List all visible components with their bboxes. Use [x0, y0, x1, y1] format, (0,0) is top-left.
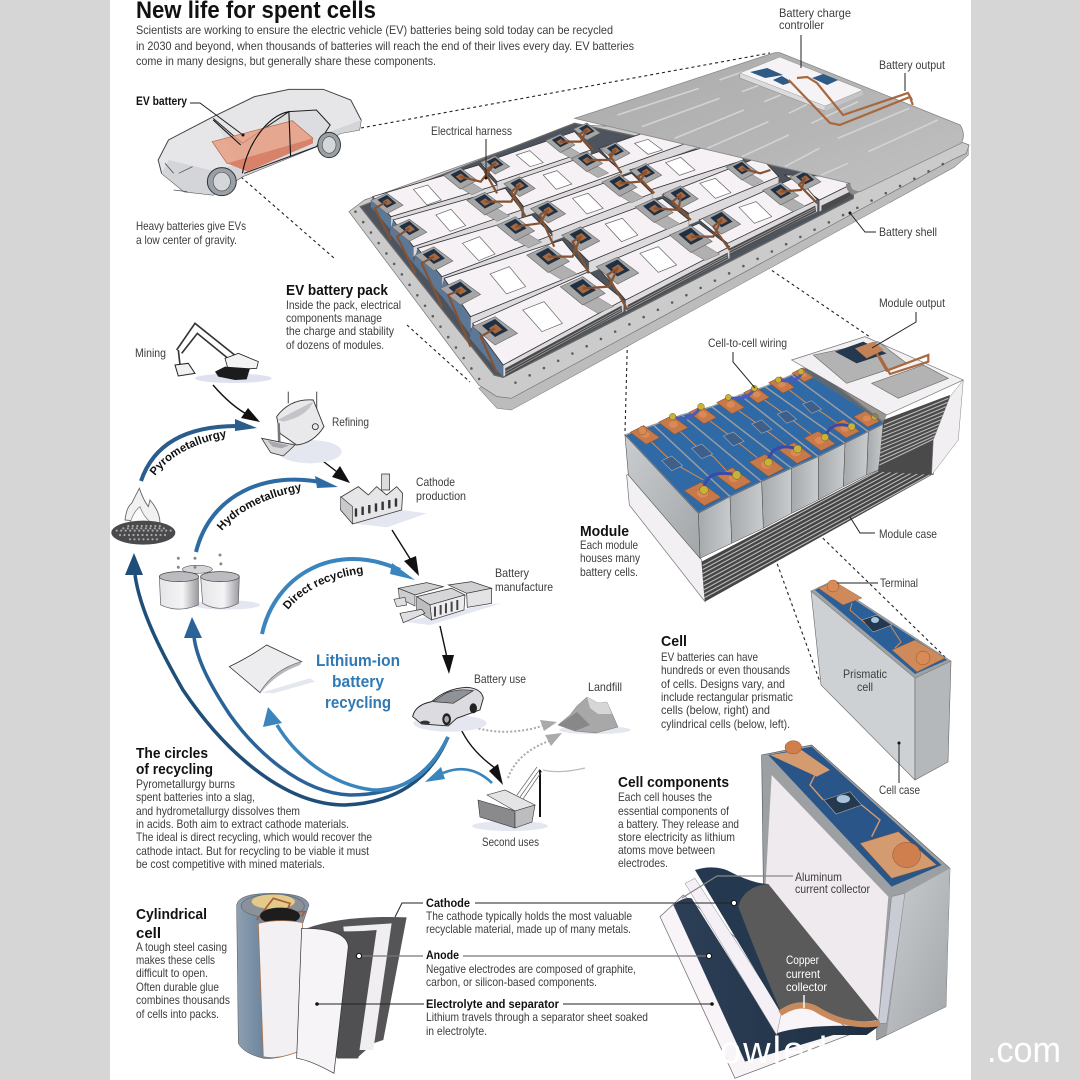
caption: low center of gravity: a low center of gravity. [136, 233, 237, 247]
module housing [792, 337, 963, 475]
title: lithium-ion battery recycling: battery [332, 672, 384, 691]
text: cell: cells (below, right) and [661, 703, 770, 717]
label: terminal [837, 576, 918, 590]
arrow: recycling return to direct [263, 707, 448, 790]
text: the circles of recycling: and hydrometallurgy dissolves them [136, 804, 300, 818]
label: battery shell [848, 212, 937, 239]
label: copper current collector: collector [786, 980, 827, 994]
label: aluminum current collector: current collector [795, 882, 870, 896]
callout: anode: Negative electrodes are composed of graphite, [426, 962, 636, 976]
cell-to-cell wiring [638, 369, 878, 494]
cylinder inner white roll [258, 921, 303, 1058]
label: electrical harness [431, 124, 512, 180]
watermark: .com [987, 1029, 1061, 1070]
text: EV battery pack [286, 282, 401, 352]
arrow: refining to cathode [315, 455, 350, 483]
intro text: in 2030 and beyond, when thousands of batteries will reach the end of their lives every day. EV batteries [136, 39, 634, 53]
label: battery shell: Battery shell [879, 225, 937, 239]
icon: battery manufacture buildings [394, 582, 502, 625]
text: the circles of recycling: The ideal is direct recycling, which would recover the [136, 830, 372, 844]
front white sheet [297, 928, 348, 1073]
text: EV battery pack: the charge and stability [286, 324, 394, 338]
icon: car in use [413, 687, 487, 732]
text: cylindrical cell: makes these cells [136, 953, 215, 967]
callout: cathode [395, 896, 737, 936]
cell traces, plates and terminals [630, 368, 879, 506]
label: EV battery: EV battery [136, 94, 187, 108]
label: module output [872, 296, 946, 348]
curved label: Pyrometallurgy: Pyrometallurgy [149, 431, 226, 476]
battery modules [371, 117, 850, 377]
label: cathode production [416, 475, 466, 503]
text: cylindrical cell [136, 906, 230, 1021]
arrow: hydrometallurgy [196, 476, 338, 552]
curved label: Hydrometallurgy: Hydrometallurgy [216, 484, 300, 530]
dark outer sheet [307, 917, 407, 1058]
label: terminal: Terminal [880, 576, 918, 590]
label: battery manufacture: Battery [495, 566, 529, 580]
text: cylindrical cell: difficult to open. [136, 966, 208, 980]
icon: second uses unit and utility pole [472, 767, 585, 831]
arrow: pyrometallurgy [141, 419, 257, 481]
text: cell components: a battery. They release and [618, 817, 739, 831]
callout: anode [356, 948, 712, 989]
label: battery manufacture: manufacture [495, 580, 553, 594]
text: EV battery pack: of dozens of modules. [286, 338, 384, 352]
icon: cathode factory [341, 474, 427, 527]
label: prismatic cell: cell [857, 680, 873, 694]
label: landfill: Landfill [588, 680, 622, 694]
label: battery charge controller: Battery charge [779, 6, 851, 20]
text: cylindrical cell: combines thousands [136, 993, 230, 1007]
arrow: direct recycling [262, 559, 415, 634]
icon: landfill [558, 697, 631, 734]
title: lithium-ion battery recycling: recycling [325, 693, 391, 712]
dark anode sheet [307, 928, 377, 1058]
label: prismatic cell: Prismatic [843, 667, 887, 681]
case frame [762, 741, 950, 1040]
text: module: houses many [580, 551, 640, 565]
intro text: Scientists are working to ensure the electric vehicle (EV) batteries being sold today can be recycled [136, 23, 613, 37]
label: battery output: Battery output [879, 58, 946, 72]
ribbed case front [702, 440, 933, 602]
title: lithium-ion battery recycling [316, 651, 400, 712]
text: cell: hundreds or even thousands [661, 663, 790, 677]
text: cylindrical cell: Cylindrical [136, 906, 207, 923]
watermark [720, 1029, 1061, 1072]
text: the circles of recycling: cathode intact. But for recycling to be viable it must [136, 844, 370, 858]
text: module: battery cells. [580, 565, 638, 579]
icon: refining ladle [262, 392, 342, 463]
label: copper current collector [786, 953, 827, 1008]
text: cell: cylindrical cells (below, left). [661, 717, 790, 731]
label: mining: Mining [135, 346, 166, 360]
label: module case [850, 517, 937, 541]
icon: leaching tanks [159, 555, 260, 610]
label: copper current collector: Copper [786, 953, 819, 967]
text: cell components: atoms move between [618, 843, 715, 857]
text: cell components: essential components of [618, 804, 730, 818]
callout: electrolyte and separator: Electrolyte and separator [426, 997, 559, 1011]
label: battery output [879, 58, 946, 91]
label: cathode production: production [416, 489, 466, 503]
text: EV battery pack: EV battery pack [286, 282, 389, 299]
label: refining: Refining [332, 415, 369, 429]
text: the circles of recycling: in acids. Both aim to extract cathode materials. [136, 817, 349, 831]
watermark: owledge [720, 1030, 876, 1072]
dashed connectors between components [241, 53, 945, 682]
callout: anode: Anode [426, 948, 459, 962]
illustration: car with EV battery [158, 89, 361, 196]
text: cylindrical cell: cell [136, 925, 161, 942]
label: cell case: Cell case [879, 783, 920, 797]
icon: excavator [175, 323, 272, 383]
arrow: dotted second uses to landfill [508, 733, 562, 778]
illustration: prismatic cell [811, 580, 951, 780]
label: aluminum current collector [682, 870, 870, 898]
text: cell components: Cell components [618, 774, 729, 791]
text: module: Each module [580, 538, 638, 552]
text: cell: Cell [661, 633, 687, 650]
text: cell components: store electricity as lithium [618, 830, 735, 844]
unrolled sheets [660, 867, 880, 1078]
text: cylindrical cell: of cells into packs. [136, 1007, 219, 1021]
text: cell: EV batteries can have [661, 650, 758, 664]
label: cell-to-cell wiring [708, 336, 787, 388]
text: cell: include rectangular prismatic [661, 690, 793, 704]
callout: electrolyte and separator: in electrolyte. [426, 1024, 487, 1038]
label: electrical harness: Electrical harness [431, 124, 512, 138]
arrow: battery use to second uses [460, 727, 503, 785]
curved label: Direct recycling: Direct recycling [282, 567, 363, 610]
text: the circles of recycling: be cost competitive with mined materials. [136, 857, 325, 871]
illustration: EV battery pack [349, 53, 969, 410]
module side ribs [505, 192, 850, 377]
label: battery charge controller [779, 6, 851, 68]
white inner sheet [343, 923, 392, 1050]
text: the circles of recycling: spent batteries into a slag, [136, 790, 255, 804]
callout: cathode: Cathode [426, 896, 470, 910]
cylinder casing [237, 893, 309, 1059]
arrow: dotted to landfill [467, 720, 557, 732]
secondary connector plates [460, 148, 805, 313]
label: copper current collector: current [786, 967, 821, 981]
cylinder top [241, 894, 305, 924]
label: module case: Module case [879, 527, 937, 541]
arrow: second uses return [425, 767, 492, 783]
folded lid [575, 53, 963, 195]
caption: low center of gravity [136, 219, 246, 247]
module case base [627, 473, 705, 602]
text: cell components: Each cell houses the [618, 790, 712, 804]
battery charge controller [740, 57, 913, 125]
callout: cathode: recyclable material, made up of many metals. [426, 922, 631, 936]
illustration: cutaway cell components [660, 741, 950, 1078]
label: battery charge controller: controller [779, 18, 824, 32]
arrow: manufacture to battery use [440, 626, 454, 674]
illustration: cylindrical cell [237, 893, 407, 1073]
recycling diagram [111, 322, 631, 849]
text: cylindrical cell: A tough steel casing [136, 940, 227, 954]
tray shell [349, 123, 969, 410]
arrow: recycling return to smelting [125, 553, 448, 805]
label: cell case [879, 742, 920, 797]
label: prismatic cell [843, 667, 887, 694]
arrow: mining to refining [213, 385, 260, 422]
arrow: recycling return to leaching [184, 617, 448, 795]
label: cell-to-cell wiring: Cell-to-cell wiring [708, 336, 787, 350]
illustration: battery module [625, 337, 963, 602]
text: cell [661, 633, 793, 731]
callout: electrolyte and separator: Lithium travels through a separator sheet soaked [426, 1010, 648, 1024]
label: EV battery [136, 94, 244, 136]
module labels [413, 139, 772, 332]
text: cell components: electrodes. [618, 856, 668, 870]
callout: cathode: The cathode typically holds the most valuable [426, 909, 632, 923]
intro text [136, 23, 634, 68]
text: the circles of recycling: of recycling [136, 761, 213, 778]
label: battery use: Battery use [474, 672, 526, 686]
text: module: Module [580, 523, 629, 540]
label: battery manufacture [495, 566, 553, 594]
callout: anode: carbon, or silicon-based components. [426, 975, 597, 989]
text: EV battery pack: Inside the pack, electrical [286, 298, 401, 312]
title: lithium-ion battery recycling: Lithium-ion [316, 651, 400, 670]
text: EV battery pack: components manage [286, 311, 382, 325]
arrow: cathode to battery manufacture [392, 530, 419, 576]
label: cathode production: Cathode [416, 475, 455, 489]
text: the circles of recycling: The circles [136, 745, 208, 762]
text: cylindrical cell: Often durable glue [136, 980, 219, 994]
intro text: come in many designs, but generally share these components. [136, 54, 436, 68]
text: the circles of recycling [136, 745, 372, 871]
text: module [580, 523, 640, 579]
label: aluminum current collector: Aluminum [795, 870, 842, 884]
caption: low center of gravity: Heavy batteries give EVs [136, 219, 246, 233]
connectors [371, 123, 821, 345]
callout: electrolyte and separator [315, 997, 714, 1038]
label: second uses: Second uses [482, 835, 539, 849]
text: cell components [618, 774, 739, 870]
text: cell: of cells. Designs vary, and [661, 677, 785, 691]
battery cells [625, 365, 885, 558]
icon: cathode sheet [229, 645, 315, 693]
icon: flames and slag pile [111, 488, 175, 545]
label: module output: Module output [879, 296, 946, 310]
text: the circles of recycling: Pyrometallurgy burns [136, 777, 235, 791]
electrical harness wires [375, 130, 817, 373]
